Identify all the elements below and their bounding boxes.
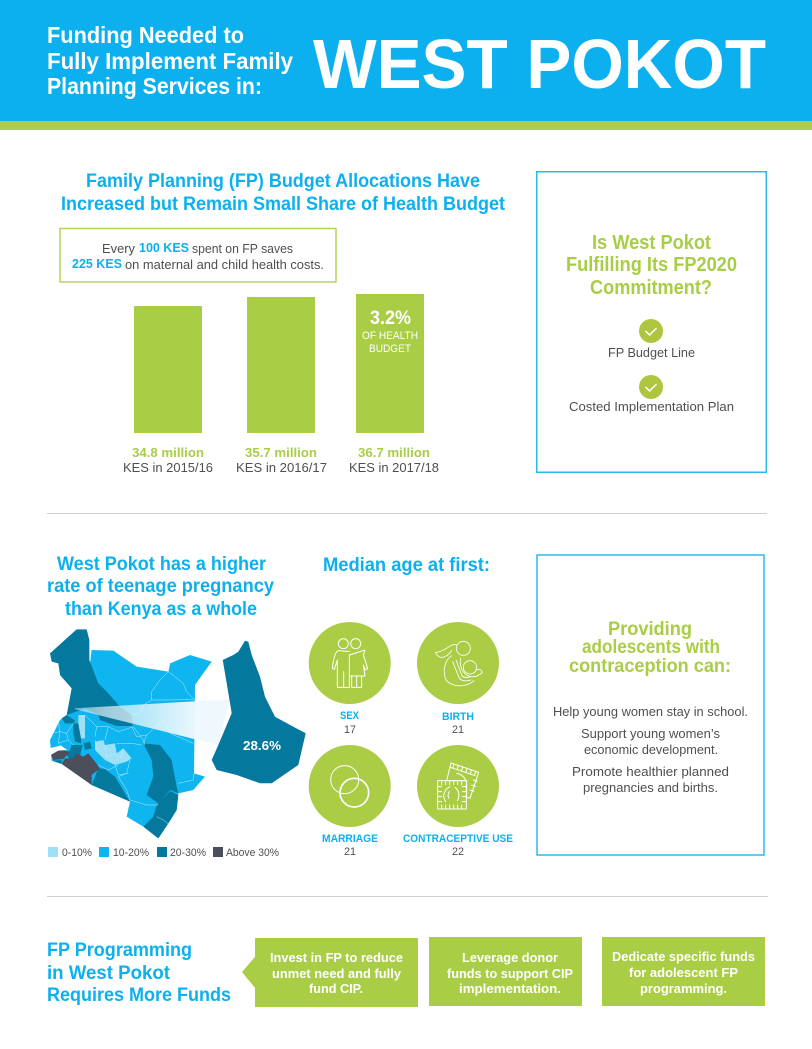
median age: birth [417,622,499,736]
recommendation: invest [242,938,418,1007]
benefit: healthier births: pregnancies and births. [583,780,718,795]
lake [48,745,67,755]
panel heading [566,232,737,299]
heading: teenage pregnancy [47,554,274,620]
heading: budget allocations: Increased but Remain Small Share of Health Budget [61,194,506,215]
map legend: 0-10% [62,847,92,859]
bar: 2017/18: BUDGET [369,343,411,355]
map legend: 20-30% [170,847,206,859]
median age: marriage [309,745,391,858]
median age: birth: 21 [452,724,464,736]
median age: contraceptive use [403,745,513,858]
heading: teenage pregnancy: West Pokot has a higher [57,554,267,575]
bar: 2017/18: 36.7 million [358,445,430,460]
median age: sex: 17 [344,724,356,736]
West Pokot enlarged county [212,641,306,783]
icon: couple [332,639,368,687]
western counties [51,715,132,785]
header subtitle: Fully Implement Family [47,48,293,74]
bar: 2017/18: 3.2% [370,308,411,329]
map legend [48,847,279,859]
header subtitle: Funding Needed to [47,22,244,48]
heading: teenage pregnancy: than Kenya as a whole [65,599,257,620]
heading: budget allocations [61,171,506,215]
median age: marriage: MARRIAGE [322,833,378,845]
header subtitle [47,22,293,99]
panel heading: adolescents with [582,637,720,658]
benefit: healthier births [572,764,729,795]
callout: savings [60,228,336,282]
callout: savings: spent on FP saves [192,241,293,256]
callout: savings: 100 KES [139,240,189,255]
header subtitle: Planning Services in: [47,73,262,99]
recommendation: dedicate funds: programming. [640,981,727,996]
heading: requires more funds: Requires More Funds [47,985,231,1006]
benefit: economic development: Support young women’s [581,726,720,741]
icon: check [639,319,663,343]
panel: FP2020 commitment [537,172,766,472]
recommendation: leverage donors [429,937,582,1006]
median age: sex [309,622,391,736]
icon: condom packets [438,763,479,809]
bar: 2017/18: OF HEALTH [362,330,418,342]
callout beam: West Pokot highlight [75,699,230,745]
costed plan: Costed Implementation Plan [569,399,734,414]
recommendation: leverage donors: funds to support CIP [447,966,573,981]
panel heading: Fulfilling Its FP2020 [566,254,737,276]
heading: median age: Median age at first: [323,555,490,576]
heading: requires more funds [47,940,231,1006]
panel: adolescents contraception [537,555,764,855]
benefit: school: Help young women stay in school. [553,704,748,719]
recommendation: dedicate funds: Dedicate specific funds [612,949,755,964]
heading: budget allocations: Family Planning (FP) Budget Allocations Have [86,171,480,192]
callout: savings: 225 KES [72,256,122,271]
median age: contraceptive use: 22 [452,846,464,858]
median age: contraceptive use: CONTRACEPTIVE USE [403,833,513,845]
panel heading: contraception can: [569,656,731,677]
heading: teenage pregnancy: rate of teenage pregnancy [47,576,274,597]
counties 20-30% [50,629,133,726]
recommendation: invest: unmet need and fully [272,966,402,981]
bar: 2015/16: 34.8 million [132,445,204,460]
bar: 2017/18 [349,294,439,475]
panel heading: Commitment? [590,277,712,299]
bar: 2015/16 [123,306,213,475]
header title: WEST POKOT [313,25,766,103]
heading: requires more funds: FP Programming [47,940,192,961]
benefit: economic development: economic development. [584,742,718,757]
panel heading [569,619,731,677]
recommendation: leverage donors: Leverage donor [462,950,558,965]
bar chart [123,294,439,475]
icon: mother and baby [435,641,482,686]
panel heading: Providing [608,619,692,640]
county borders [50,663,194,824]
bar: 2016/17: KES in 2016/17 [236,460,327,475]
bar: 2015/16: KES in 2015/16 [123,460,213,475]
callout: savings: Every [102,241,135,256]
map legend: Above 30% [226,847,279,859]
counties 0-10% [78,715,132,765]
recommendation: invest: fund CIP. [309,981,363,996]
median age: birth: BIRTH [442,711,474,723]
callout: savings: on maternal and child health costs. [125,257,324,272]
bar: 2016/17 [236,297,327,475]
recommendation: invest: Invest in FP to reduce [270,950,403,965]
West Pokot enlarged county: 28.6% [243,738,281,753]
panel heading: Is West Pokot [592,232,711,254]
bar: 2017/18: KES in 2017/18 [349,460,439,475]
map legend: 10-20% [113,847,149,859]
counties above 30% [51,749,100,785]
median age: marriage: 21 [344,846,356,858]
recommendation: leverage donors: implementation. [459,981,561,996]
map of Kenya [48,629,212,838]
heading: requires more funds: in West Pokot [47,963,171,984]
FP budget line: FP Budget Line [608,345,695,360]
recommendation: dedicate funds [602,937,765,1006]
counties 10-20% [50,650,212,838]
icon: rings [331,766,369,807]
benefit: economic development [581,726,720,757]
header banner [0,0,812,130]
median age: sex: SEX [340,710,360,722]
bar: 2016/17: 35.7 million [245,445,317,460]
recommendation: dedicate funds: for adolescent FP [629,965,738,980]
icon: check [639,375,663,399]
benefit: healthier births: Promote healthier planned [572,764,729,779]
